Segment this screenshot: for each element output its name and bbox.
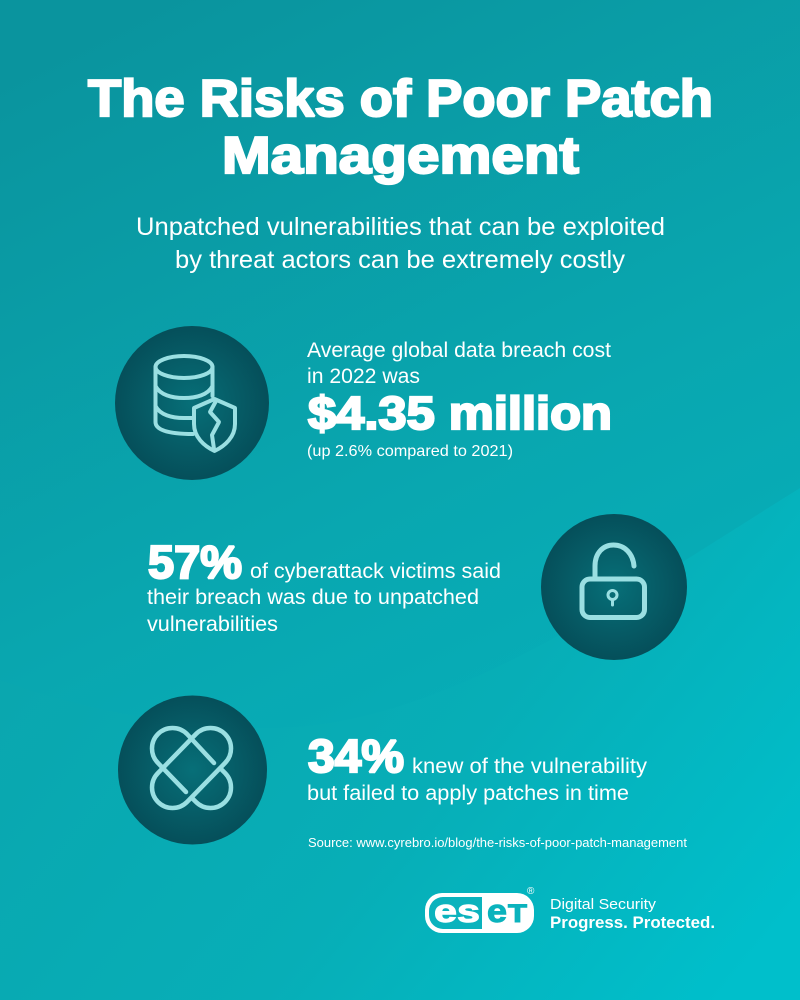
logo: ESET: e [487,893,507,929]
text: cyberattack victims [147,560,501,636]
text: average global data breach cost: in 2022 was [307,365,420,388]
stat: 57%: 57% [148,536,242,588]
stat: 34%: 34% [308,730,404,782]
text: average global data breach cost [307,339,611,388]
icon: database with cracked shield [115,326,269,480]
panel: knew of the vulnerability [118,696,648,844]
text: knew of the vulnerability: but failed to apply patches in time [307,782,629,805]
icon: crossed bandage [118,696,267,844]
subtitle: Unpatched vulnerabilities that can be exploited [136,213,665,241]
text: cyberattack victims: vulnerabilities [147,613,278,636]
tagline: Progress. Protected. [550,913,715,932]
subtitle: by threat actors can be extremely costly [175,246,626,274]
text: cyberattack victims: of cyberattack victims said [250,560,501,583]
tagline: Digital Security [550,896,657,913]
title [88,70,713,185]
source: Source: www.cyrebro.io/blog/the-risks-of-poor-patch-management [308,836,688,850]
text: average global data breach cost: Average global data breach cost [307,339,611,362]
subtitle [136,213,665,274]
text: knew of the vulnerability [307,755,648,805]
text: knew of the vulnerability: knew of the vulnerability [412,755,648,778]
logo: ESET [425,886,535,933]
title: Management [222,127,579,185]
title: The Risks of Poor Patch [88,70,713,128]
background curve [0,488,800,1000]
note: up 2.6%: (up 2.6% compared to 2021) [307,443,513,460]
panel: data breach cost [115,326,612,480]
logo: ESET: T [508,900,527,928]
panel: unpatched victims [147,514,687,660]
logo: ESET: es [434,893,480,929]
icon: open padlock [541,514,687,660]
text: cyberattack victims: their breach was due to unpatched [147,586,479,609]
logo: ESET: ® [527,886,535,897]
tagline [550,896,715,932]
stat: $4.35 million: $4.35 million [308,387,612,439]
